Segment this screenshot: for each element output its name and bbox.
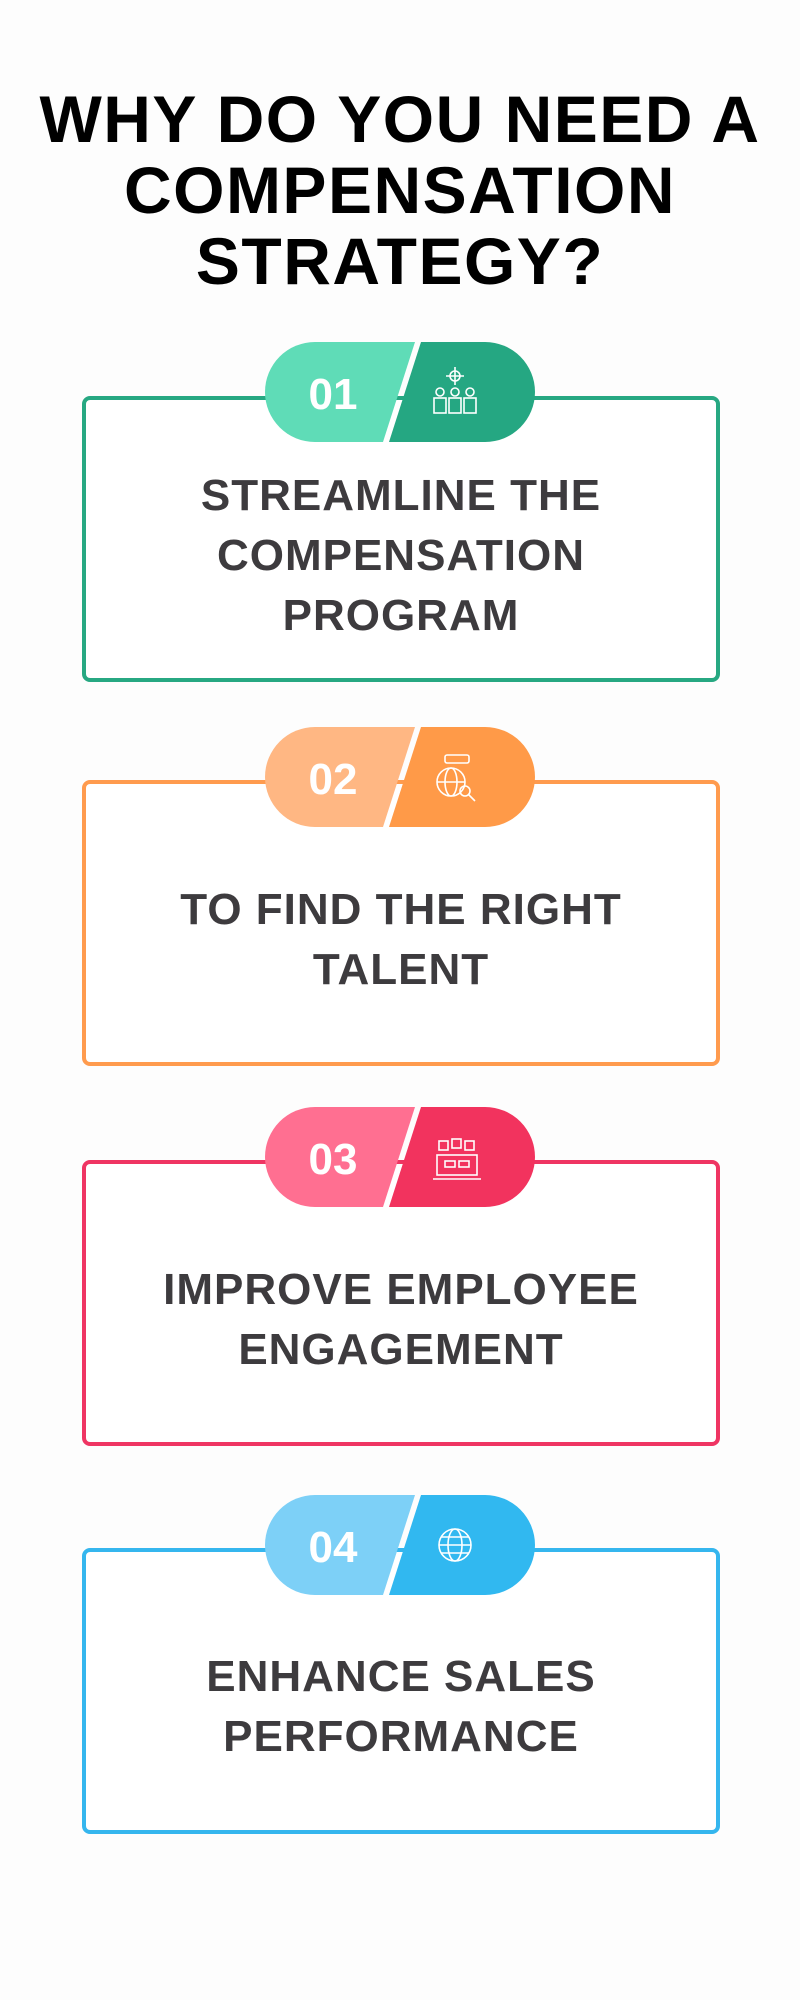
text: 04: ENHANCE SALES bbox=[206, 1652, 596, 1701]
panel: 01 bbox=[82, 396, 720, 682]
badge: 04 bbox=[265, 1495, 535, 1595]
title bbox=[39, 82, 761, 298]
icon: social media laptop bbox=[433, 1139, 481, 1179]
title: STRATEGY? bbox=[196, 224, 604, 298]
badge: 02: 02 bbox=[309, 755, 357, 804]
badge: 01 bbox=[265, 342, 535, 442]
text: 01 bbox=[201, 471, 601, 640]
icon: team target bbox=[434, 367, 476, 413]
text: 02: TALENT bbox=[313, 945, 489, 994]
text: 01: COMPENSATION bbox=[217, 531, 585, 580]
text: 01: PROGRAM bbox=[283, 591, 519, 640]
text: 04: PERFORMANCE bbox=[223, 1712, 579, 1761]
text: 02: TO FIND THE RIGHT bbox=[180, 885, 622, 934]
badge: 04: 04 bbox=[309, 1523, 358, 1572]
badge: 03: 03 bbox=[309, 1135, 357, 1184]
panel: 03 bbox=[82, 1160, 720, 1446]
text: 01: STREAMLINE THE bbox=[201, 471, 601, 520]
panel: 04 bbox=[82, 1548, 720, 1834]
text: 03: ENGAGEMENT bbox=[238, 1325, 564, 1374]
icon: globe www bbox=[439, 1529, 471, 1561]
badge: 01: 01 bbox=[309, 370, 357, 419]
title: COMPENSATION bbox=[124, 153, 676, 227]
panel: 02 bbox=[82, 780, 720, 1066]
text: 02 bbox=[180, 885, 622, 994]
icon: globe search bbox=[437, 755, 475, 801]
text: 03 bbox=[163, 1265, 639, 1374]
text: 04 bbox=[206, 1652, 596, 1761]
badge: 02 bbox=[265, 727, 535, 827]
text: 03: IMPROVE EMPLOYEE bbox=[163, 1265, 639, 1314]
title: WHY DO YOU NEED A bbox=[39, 82, 761, 156]
badge: 03 bbox=[265, 1107, 535, 1207]
